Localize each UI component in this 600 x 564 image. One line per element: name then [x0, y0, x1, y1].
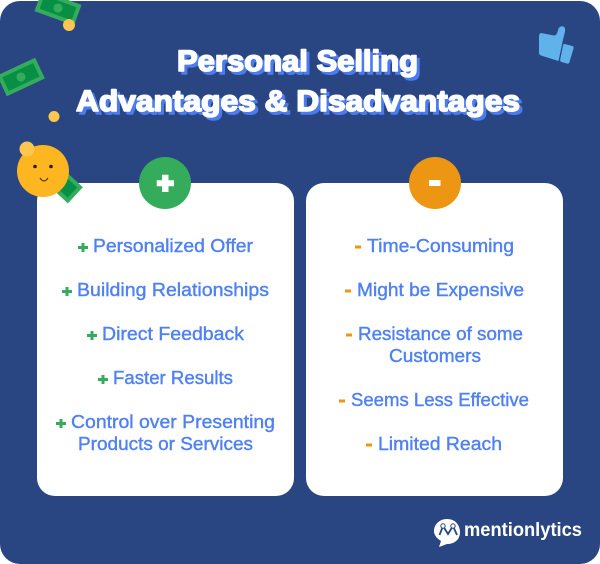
- title: Advantages & Disadvantages: [79, 88, 523, 121]
- advantage: direct feedback: Direct Feedback: [102, 324, 245, 344]
- title: Personal Selling: [180, 48, 421, 81]
- icon: money bill left: [0, 58, 45, 96]
- logo: mentionlytics: [434, 519, 582, 547]
- advantage: control over presenting: Control over Presenting: [71, 412, 275, 432]
- icon: coin top: [63, 19, 75, 31]
- icon: minus badge: [409, 157, 461, 209]
- icon: logo speech bubble: [434, 519, 460, 547]
- icon: plus badge: [139, 157, 191, 209]
- panel: advantages: [37, 157, 294, 496]
- title: Advantages & Disadvantages: [76, 85, 520, 118]
- advantage: personalized offer: Personalized Offer: [93, 236, 253, 256]
- disadvantage: resistance of some customers: Resistance of some: [358, 324, 523, 344]
- advantage: control over presenting: [56, 412, 275, 454]
- disadvantage: limited reach: Limited Reach: [378, 434, 502, 454]
- title: Personal Selling: [177, 45, 418, 78]
- icon: coin middle: [48, 111, 60, 122]
- disadvantage: resistance of some customers: Customers: [389, 346, 481, 366]
- icon: smiley face: [17, 142, 69, 197]
- disadvantage: time-consuming: Time-Consuming: [367, 236, 514, 256]
- advantage: building relationships: Building Relationships: [77, 280, 269, 300]
- icon: money bill top: [35, 0, 81, 26]
- disadvantage: might be expensive: Might be Expensive: [357, 280, 524, 300]
- panel: disadvantages: [306, 157, 563, 496]
- disadvantage: resistance of some customers: [346, 324, 523, 366]
- disadvantage: seems less effective: Seems Less Effective: [351, 390, 529, 410]
- logo text: mentionlytics: [464, 520, 582, 541]
- advantage: faster results: Faster Results: [113, 368, 233, 388]
- advantage: control over presenting: Products or Services: [78, 434, 253, 454]
- title: [76, 45, 523, 121]
- icon: thumbs up: [539, 26, 574, 64]
- icon: money bill behind smiley: [37, 159, 83, 203]
